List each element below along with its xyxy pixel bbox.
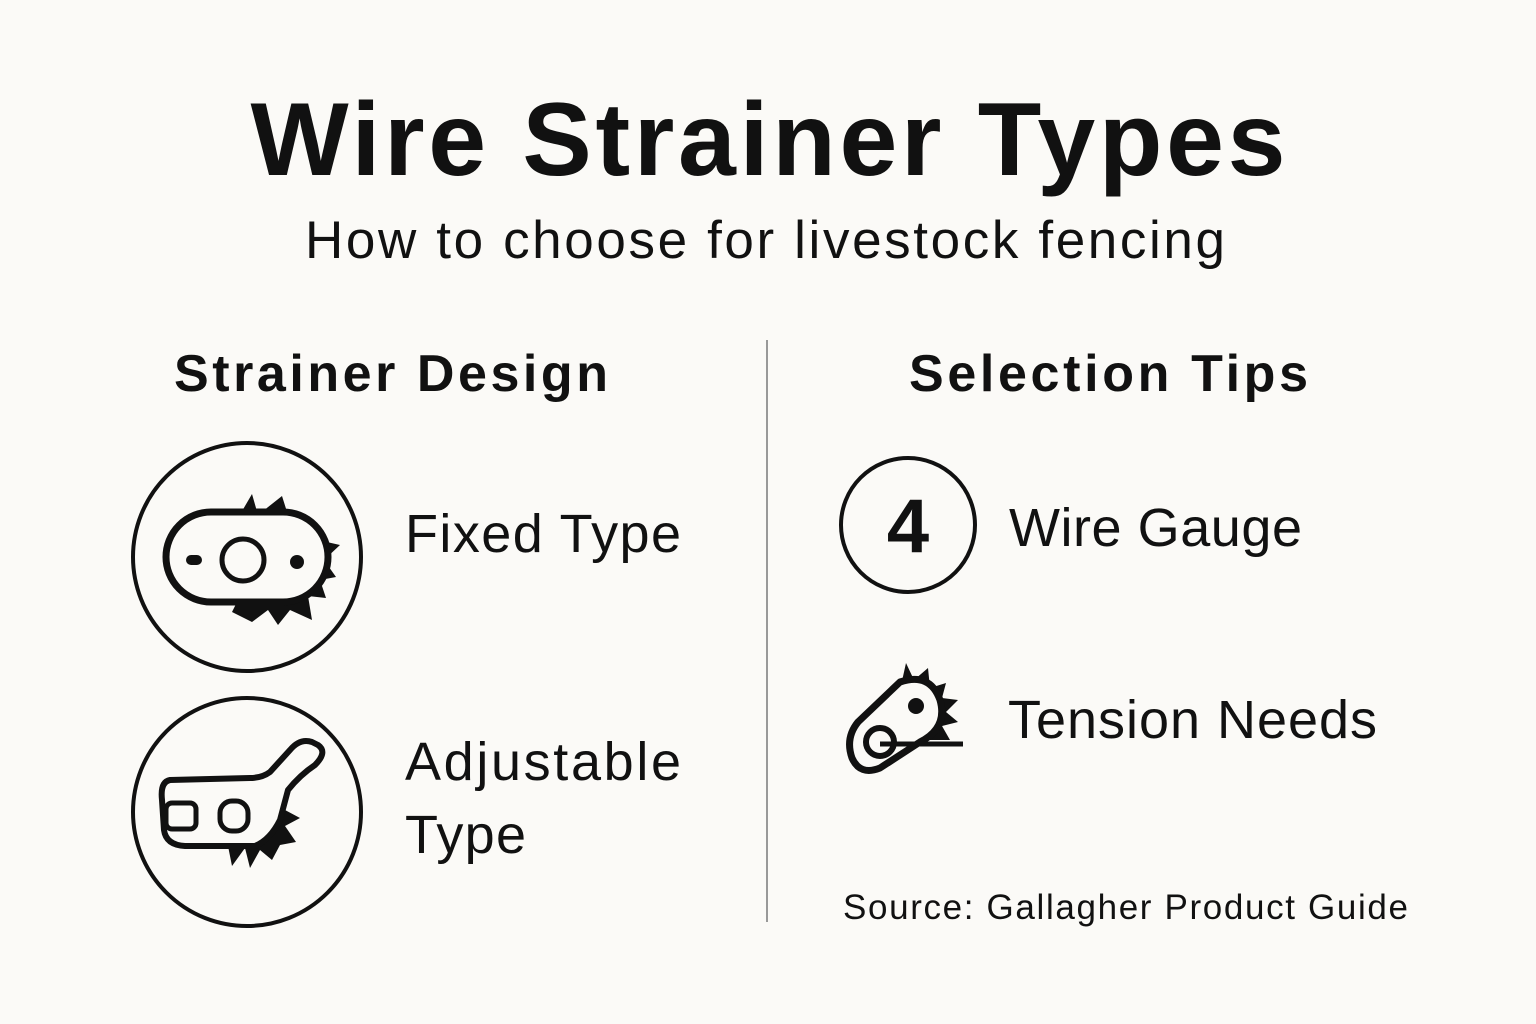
icon: tension ratchet <box>850 663 963 770</box>
subtitle: How to choose for livestock fencing <box>305 211 1225 270</box>
title: Wire Strainer Types <box>250 82 1286 198</box>
source note: Source: Gallagher Product Guide <box>843 888 1408 927</box>
label: fixed type: Fixed Type <box>405 504 681 564</box>
icon: fixed strainer <box>133 443 361 671</box>
heading: strainer design: Strainer Design <box>174 345 608 403</box>
heading: selection tips: Selection Tips <box>909 345 1308 403</box>
label: adjustable type: Adjustable <box>405 732 681 792</box>
label: wire gauge: Wire Gauge <box>1009 498 1302 558</box>
icon: adjustable strainer <box>133 698 361 926</box>
icon: number 4 <box>841 458 975 592</box>
icon: number 4: 4 <box>887 484 929 569</box>
label: tension needs: Tension Needs <box>1008 690 1377 750</box>
text: Type <box>405 805 526 865</box>
